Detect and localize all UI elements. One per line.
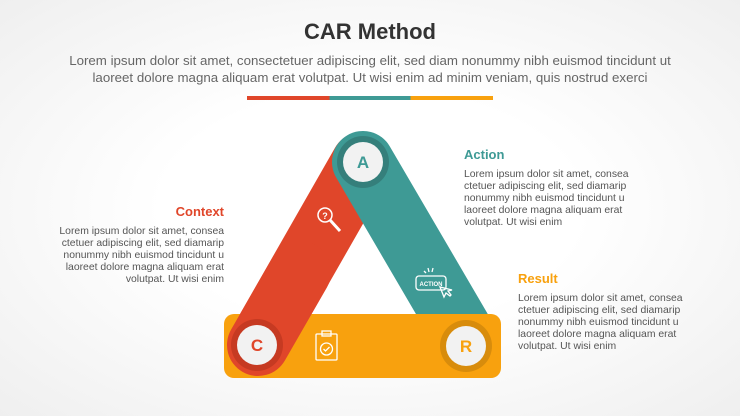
action text: nonummy nibh euismod tincidunt u (464, 193, 625, 204)
icon: action button: ACTION (420, 282, 442, 288)
red band (258, 163, 362, 345)
action text: volutpat. Ut wisi enim (464, 217, 562, 228)
icon: magnifier: ? (322, 211, 328, 221)
context text: ctetuer adipiscing elit, sed diamarip (62, 238, 224, 249)
subtitle: laoreet dolore magna aliquam erat volutpat. Ut wisi enim ad minim veniam, quis nostrud exerci (92, 70, 648, 85)
result text: laoreet dolore magna aliquam erat (518, 329, 676, 340)
action text: Lorem ipsum dolor sit amet, consea (464, 169, 629, 180)
subtitle (69, 53, 671, 85)
result heading: Result (518, 271, 558, 286)
title: CAR Method (304, 19, 436, 44)
subtitle: Lorem ipsum dolor sit amet, consectetuer adipiscing elit, sed diam nonummy nibh euismod tincidunt ut (69, 53, 671, 68)
icon: clipboard (316, 331, 337, 360)
title underline (247, 96, 493, 100)
context text (59, 226, 224, 285)
result text: ctetuer adipiscing elit, sed diamarip (518, 305, 680, 316)
context heading: Context (176, 204, 224, 219)
teal band (363, 162, 470, 345)
circle C: C (251, 336, 263, 355)
context text: volutpat. Ut wisi enim (126, 274, 224, 285)
action heading: Action (464, 147, 504, 162)
context text: nonummy nibh euismod tincidunt u (63, 250, 224, 261)
result text (518, 293, 683, 352)
action text (464, 169, 629, 228)
result text: nonummy nibh euismod tincidunt u (518, 317, 679, 328)
action text: laoreet dolore magna aliquam erat (464, 205, 622, 216)
circle C (231, 319, 283, 371)
circle A: A (357, 153, 369, 172)
circle A (337, 136, 389, 188)
circle R (440, 320, 492, 372)
result text: volutpat. Ut wisi enim (518, 341, 616, 352)
orange band (224, 314, 501, 378)
icon: action button (416, 268, 452, 297)
action text: ctetuer adipiscing elit, sed diamarip (464, 181, 626, 192)
result text: Lorem ipsum dolor sit amet, consea (518, 293, 683, 304)
icon: magnifier (318, 208, 340, 231)
context text: laoreet dolore magna aliquam erat (66, 262, 224, 273)
context text: Lorem ipsum dolor sit amet, consea (59, 226, 224, 237)
circle R: R (460, 337, 472, 356)
red lower overlay (258, 272, 300, 345)
